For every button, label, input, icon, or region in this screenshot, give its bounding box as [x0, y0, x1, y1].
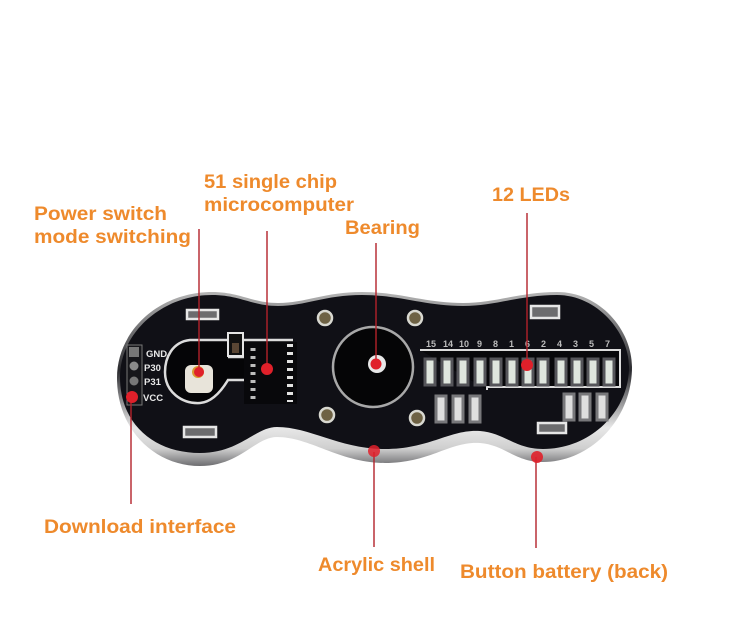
callout: button battery: Button battery (back)	[460, 562, 668, 583]
callout: acrylic shell: Acrylic shell	[318, 555, 435, 576]
callout: bearing	[345, 218, 420, 370]
callout: power switch: Power switch	[34, 204, 167, 225]
circuit board	[120, 295, 629, 453]
led row frame	[420, 350, 620, 390]
microcontroller chip	[244, 342, 297, 404]
device: spinner board	[117, 292, 632, 466]
LED silkscreen labels: 4	[557, 339, 562, 349]
lower LEDs right group	[564, 394, 607, 420]
callout: power switch	[34, 204, 204, 377]
LED silkscreen labels: 5	[589, 339, 594, 349]
LED silkscreen labels: 7	[605, 339, 610, 349]
callout: download interface: Download interface	[44, 517, 236, 538]
switch cutout	[165, 340, 293, 403]
mounting clips	[184, 306, 566, 437]
pin labels: P31	[144, 377, 162, 388]
pin labels: VCC	[143, 393, 163, 404]
callout: microcomputer: 51 single chip	[204, 172, 337, 193]
LED silkscreen labels: 14	[443, 339, 453, 349]
callout: 12 LEDs	[492, 185, 570, 371]
12 LEDs	[425, 359, 614, 385]
LED silkscreen labels: 15	[426, 339, 436, 349]
callout: power switch: mode switching	[34, 227, 191, 248]
power switch	[185, 365, 213, 393]
LED silkscreen labels: 3	[573, 339, 578, 349]
LED silkscreen labels: 8	[493, 339, 498, 349]
callout: microcomputer: microcomputer	[204, 195, 355, 216]
callout: bearing: Bearing	[345, 218, 420, 239]
callout: microcomputer	[204, 172, 355, 375]
LED silkscreen labels: 10	[459, 339, 469, 349]
LED silkscreen labels	[426, 339, 610, 349]
pin labels: P30	[144, 363, 161, 374]
LED silkscreen labels: 9	[477, 339, 482, 349]
pin labels: GND	[146, 349, 167, 360]
callout: button battery	[460, 451, 668, 583]
acrylic shell	[117, 292, 632, 466]
pin labels	[143, 349, 167, 404]
LED silkscreen labels: 6	[525, 339, 530, 349]
callout: download interface	[44, 391, 236, 538]
download interface pins	[127, 345, 142, 405]
bearing	[333, 327, 413, 407]
LED silkscreen labels: 2	[541, 339, 546, 349]
callout: 12 LEDs: 12 LEDs	[492, 185, 570, 206]
LED silkscreen labels: 1	[509, 339, 514, 349]
lower LEDs left group	[436, 396, 480, 422]
callout: acrylic shell	[318, 445, 435, 576]
screws	[318, 311, 424, 425]
capacitor C1	[228, 333, 243, 356]
